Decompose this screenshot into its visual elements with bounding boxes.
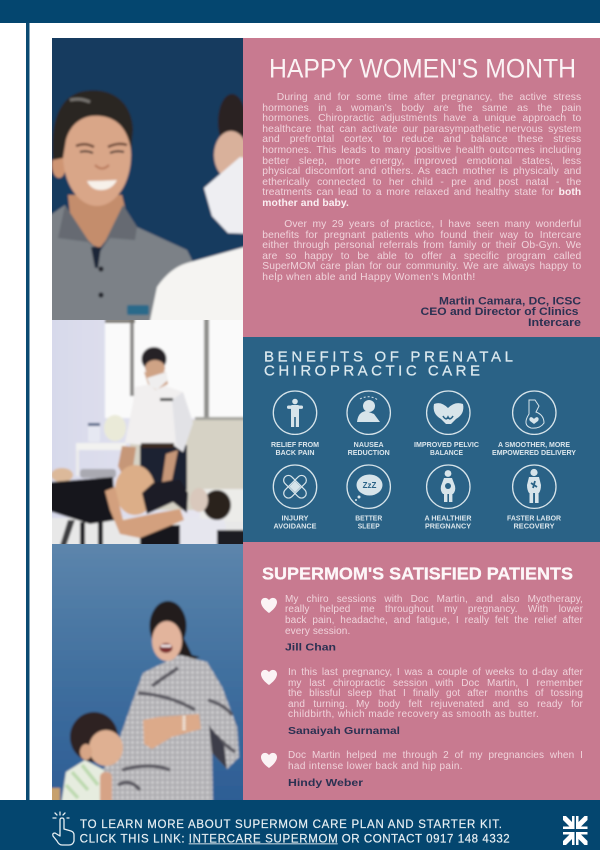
icon labels: benefits: BALANCE bbox=[430, 450, 463, 457]
icon labels: benefits: NAUSEA bbox=[354, 442, 384, 449]
icon: healthier pregnancy bbox=[427, 465, 470, 508]
icon labels: benefits: A SMOOTHER, MORE bbox=[498, 442, 570, 449]
heading: benefits of prenatal chiropractic care bbox=[264, 348, 513, 380]
heading: supermom's satisfied patients: SUPERMOM'S SATISFIED PATIENTS bbox=[262, 564, 573, 584]
icon: faster labor recovery bbox=[513, 465, 556, 508]
icon labels: benefits: RELIEF FROM bbox=[271, 442, 319, 449]
icon labels: benefits: INJURY bbox=[282, 516, 309, 522]
icon grid: benefits bbox=[273, 391, 556, 508]
patient name: sanaiyah gurnamal: Sanaiyah Gurnamal bbox=[288, 725, 400, 737]
photo: laughing pregnant patient with child bbox=[52, 544, 243, 800]
testimonial: sanaiyah gurnamal: childbirth, which made recovery as smooth as butter. bbox=[288, 709, 539, 720]
footer bar bbox=[0, 800, 600, 850]
icon labels: benefits bbox=[271, 442, 576, 530]
text block: pregnancy and stress hormones paragraph bbox=[262, 92, 581, 209]
icon: nausea reduction bbox=[347, 391, 390, 434]
text block: pregnancy and stress hormones paragraph: mother and baby. bbox=[262, 198, 349, 209]
text block: pregnancy and stress hormones paragraph: During and for some time after pregnancy, the active stress bbox=[277, 92, 581, 103]
icon labels: benefits: BETTER bbox=[355, 516, 382, 522]
logo: intercare arrows bbox=[563, 816, 588, 845]
icon: better sleep bbox=[347, 465, 390, 508]
text block: years of practice paragraph bbox=[262, 219, 581, 283]
text block: years of practice paragraph: help when able and Happy Women's Month! bbox=[262, 272, 476, 283]
text block: pregnancy and stress hormones paragraph: etherically connected to her child - pre and post natal - the bbox=[262, 177, 581, 188]
footer call to action text: TO LEARN MORE ABOUT SUPERMOM CARE PLAN AND STARTER KIT. bbox=[80, 819, 502, 831]
testimonial: jill chan: My chiro sessions with Doc Martin, and also Myotherapy, bbox=[285, 594, 583, 605]
panel: benefits background bbox=[243, 337, 600, 542]
patient name: hindy weber: Hindy Weber bbox=[288, 777, 363, 789]
testimonial: sanaiyah gurnamal: In this last pregnancy, I was a couple of weeks to d-day after bbox=[288, 667, 583, 678]
icon: tapping hand bbox=[53, 812, 74, 845]
patient name: jill chan: Jill Chan bbox=[285, 642, 336, 654]
signature: martin camara: CEO and Director of Clinics bbox=[420, 306, 578, 318]
panel: message background bbox=[243, 38, 600, 337]
text block: years of practice paragraph: Over my 29 years of practice, I have seen many wonderful bbox=[284, 219, 581, 230]
text block: years of practice paragraph: are so happy to be able to offer a specific program called bbox=[262, 251, 581, 262]
text block: years of practice paragraph: benefits for pregnant patients who found their way to Intercare bbox=[262, 230, 581, 241]
heading: happy women's month: HAPPY WOMEN'S MONTH bbox=[269, 54, 576, 84]
icon: better sleep: ZzZ bbox=[363, 481, 376, 490]
testimonial: sanaiyah gurnamal bbox=[288, 667, 583, 720]
icon labels: benefits: A HEALTHIER bbox=[424, 516, 472, 522]
text block: pregnancy and stress hormones paragraph: treatments can lead to a more relaxed and healthy state for both bbox=[262, 187, 581, 198]
photo: doctor portrait with masked patient bbox=[52, 38, 243, 320]
icon labels: benefits: RECOVERY bbox=[514, 523, 555, 530]
text block: pregnancy and stress hormones paragraph: hormones. This leads to many positive health outcomes including bbox=[262, 145, 581, 156]
testimonial: jill chan: every session. bbox=[285, 626, 350, 637]
heading: benefits of prenatal chiropractic care: CHIROPRACTIC CARE bbox=[264, 362, 480, 380]
icon: smoother delivery bbox=[513, 391, 556, 434]
testimonial: sanaiyah gurnamal: and turning. My body felt rejuvenated and so ready for bbox=[288, 699, 583, 710]
testimonial: sanaiyah gurnamal: the blissful sleep that I finally got after months of tossing bbox=[288, 688, 583, 699]
icon labels: benefits: AVOIDANCE bbox=[274, 523, 317, 530]
icon labels: benefits: EMPOWERED DELIVERY bbox=[492, 450, 576, 457]
left vertical rule bbox=[26, 23, 30, 800]
footer call to action text: CLICK THIS LINK: bbox=[80, 833, 185, 845]
icon labels: benefits: PREGNANCY bbox=[425, 523, 471, 530]
icon: heart 2 bbox=[261, 670, 277, 685]
testimonial: hindy weber: Doc Martin helped me through 2 of my pregnancies when I bbox=[288, 750, 583, 761]
text block: pregnancy and stress hormones paragraph: and prefrontal cortex to reduce and balance these stress bbox=[262, 134, 581, 145]
text block: years of practice paragraph: SuperMOM care plan for our community. We are always happy to bbox=[262, 261, 581, 272]
panel: testimonials background bbox=[243, 542, 600, 800]
testimonial: jill chan: back pain, headache, and fatigue, I really felt the relief after bbox=[285, 615, 583, 626]
heading: benefits of prenatal chiropractic care: BENEFITS OF PRENATAL bbox=[264, 348, 513, 366]
testimonial: hindy weber: had intense lower back and hip pain. bbox=[288, 761, 463, 772]
testimonial: sanaiyah gurnamal: my last chiropractic session with Doc Martin, I remember bbox=[288, 678, 583, 689]
footer call to action text bbox=[80, 819, 510, 845]
text block: pregnancy and stress hormones paragraph: better sleep, more energy, improved emotional states, less bbox=[262, 156, 581, 167]
icon labels: benefits: IMPROVED PELVIC bbox=[414, 442, 479, 449]
icon labels: benefits: BACK PAIN bbox=[276, 450, 314, 457]
icon: relief from back pain bbox=[273, 391, 317, 434]
text block: pregnancy and stress hormones paragraph: physical discomfort and others. As each mother is physically and bbox=[262, 166, 581, 177]
testimonial: jill chan: really helped me throughout my pregnancy. With lower bbox=[285, 604, 583, 615]
icon labels: benefits: FASTER LABOR bbox=[507, 516, 561, 522]
text block: years of practice paragraph: either through personal referrals from family or their Ob-Gyn. We bbox=[262, 240, 581, 251]
icon: heart 1 bbox=[261, 598, 277, 613]
footer call to action text: OR CONTACT 0917 148 4332 bbox=[342, 833, 510, 845]
icon: injury avoidance bbox=[273, 465, 317, 508]
signature: martin camara: Martin Camara, DC, ICSC bbox=[439, 296, 581, 308]
icon labels: benefits: SLEEP bbox=[358, 523, 380, 530]
icon: improved pelvic balance bbox=[427, 391, 470, 434]
icon labels: benefits: REDUCTION bbox=[348, 450, 390, 457]
text block: pregnancy and stress hormones paragraph: hormones in a woman's body are the same as the pain bbox=[262, 103, 581, 114]
testimonial: jill chan bbox=[285, 594, 583, 637]
signature: martin camara bbox=[420, 296, 581, 329]
signature: martin camara: Intercare bbox=[528, 317, 581, 329]
icon: heart 3 bbox=[261, 753, 277, 768]
footer call to action text: INTERCARE SUPERMOM bbox=[189, 833, 338, 845]
text block: pregnancy and stress hormones paragraph: healthcare that can activate our parasympathetic nervous system bbox=[262, 124, 581, 135]
text block: pregnancy and stress hormones paragraph: hormones. Chiropractic adjustments have a unique approach to bbox=[262, 113, 581, 124]
photo: chiropractor adjusting pregnant patient bbox=[52, 320, 243, 544]
testimonial: hindy weber bbox=[288, 750, 583, 772]
top bar bbox=[0, 0, 600, 23]
